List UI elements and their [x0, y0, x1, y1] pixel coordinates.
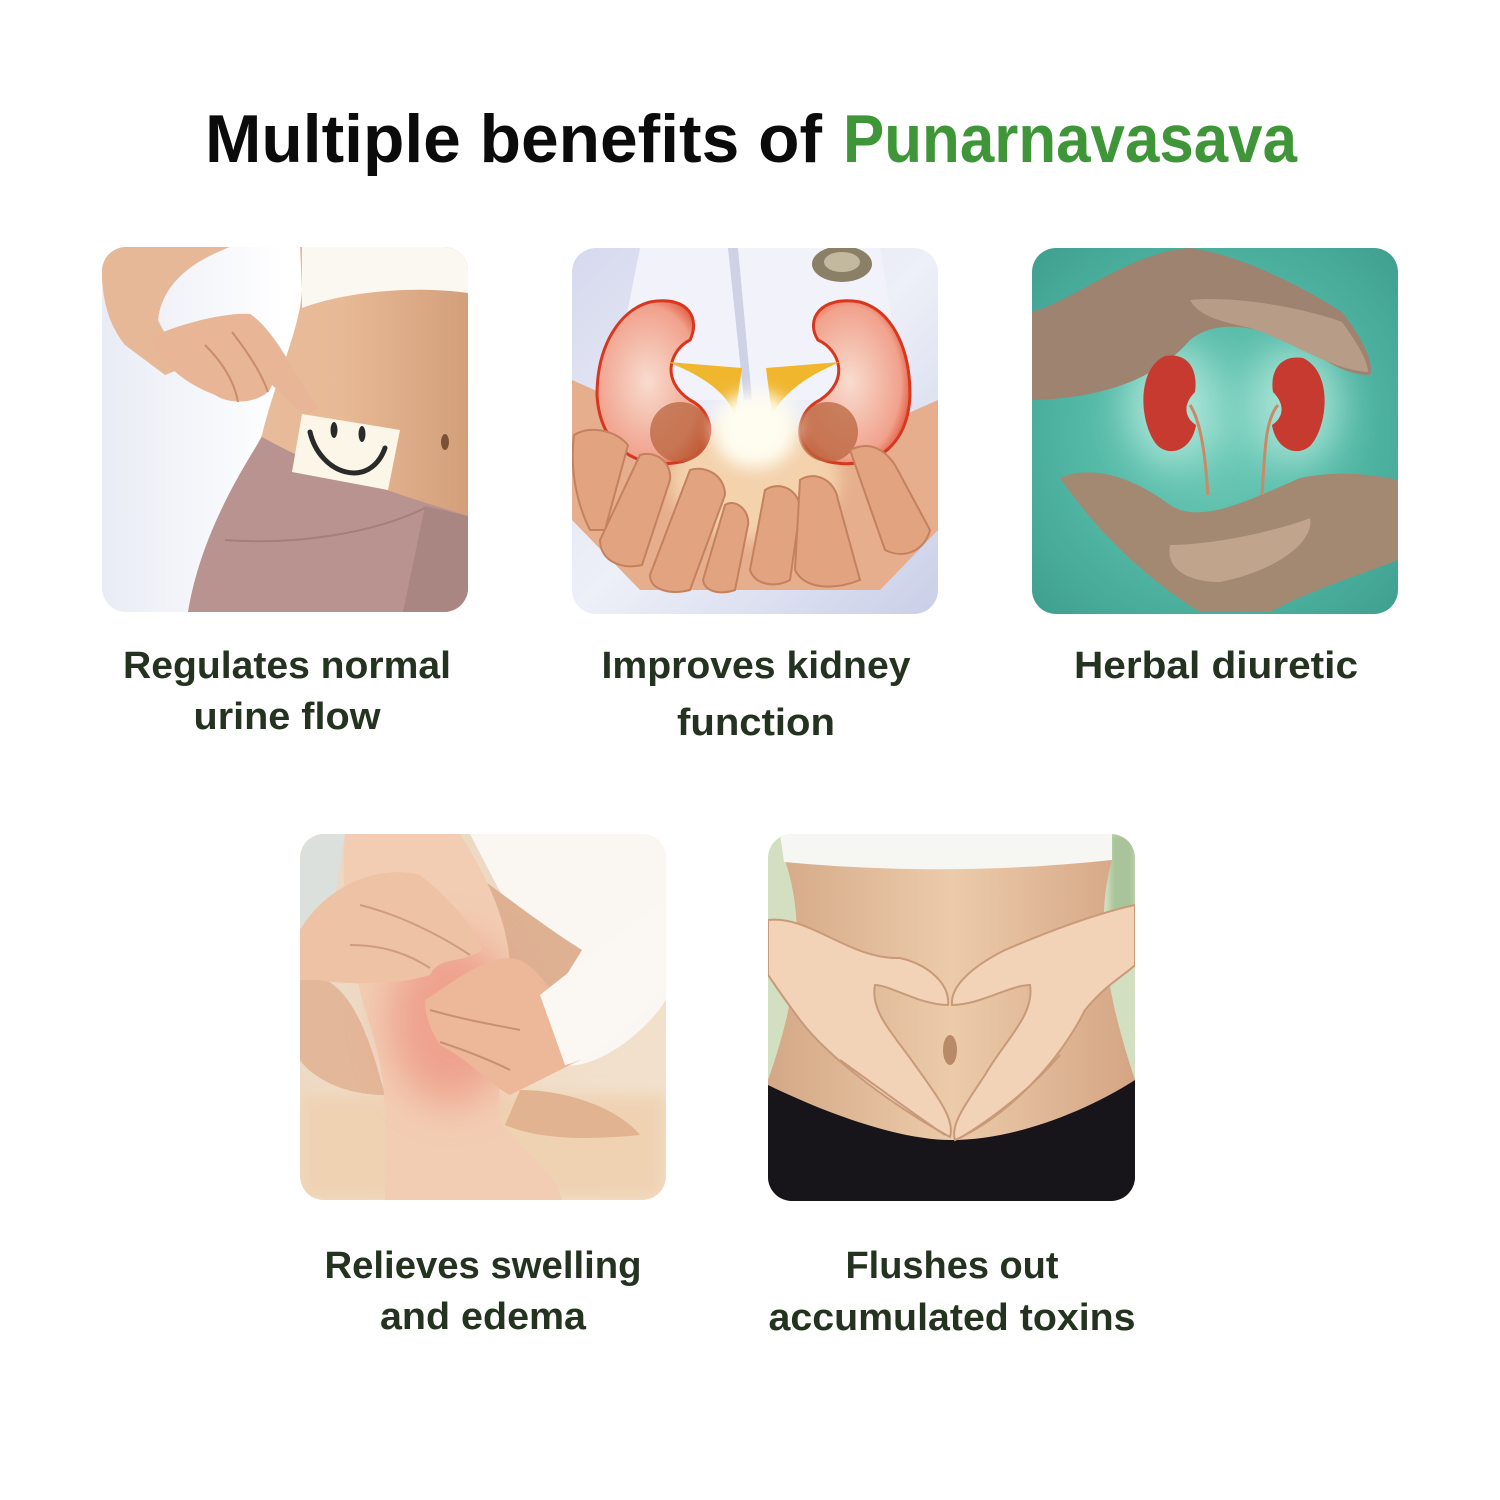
kidneys [1143, 355, 1196, 451]
panel: herbal diuretic [1032, 248, 1398, 687]
panel: flushes out accumulated toxins [768, 834, 1136, 1339]
upper hand [300, 872, 482, 983]
left hand [768, 920, 951, 1137]
title: Punarnavasava [843, 101, 1298, 177]
title: Multiple benefits of [205, 101, 822, 177]
caption: Herbal diuretic [1074, 645, 1358, 687]
caption: and edema [380, 1296, 587, 1338]
caption: Relieves swelling [324, 1245, 642, 1287]
caption: Flushes out [846, 1245, 1059, 1287]
photo: waist with smiley note [102, 247, 468, 612]
caption: accumulated toxins [768, 1297, 1136, 1339]
caption [123, 645, 451, 738]
photo: glowing kidneys in cupped hands [572, 246, 938, 614]
caption: Improves kidney [602, 645, 910, 687]
caption: urine flow [194, 696, 381, 738]
caption [324, 1245, 642, 1338]
caption [602, 645, 910, 744]
panel: relieves swelling and edema [300, 834, 666, 1338]
title [205, 101, 1298, 177]
panel: improves kidney function [572, 246, 938, 744]
upper hand [1032, 248, 1371, 400]
caption: Regulates normal [123, 645, 451, 687]
lower hand [425, 958, 580, 1095]
photo: hands holding swollen leg [300, 834, 666, 1200]
right kidney [800, 301, 910, 464]
photo: hands protecting kidneys on teal [1032, 248, 1398, 614]
photo: hands making heart on belly [768, 834, 1135, 1201]
right hand [952, 905, 1135, 1140]
caption [768, 1245, 1136, 1339]
caption: function [677, 702, 835, 744]
left kidney [597, 301, 710, 464]
panel: regulates normal urine flow [102, 247, 468, 738]
lower hand [1060, 472, 1398, 612]
